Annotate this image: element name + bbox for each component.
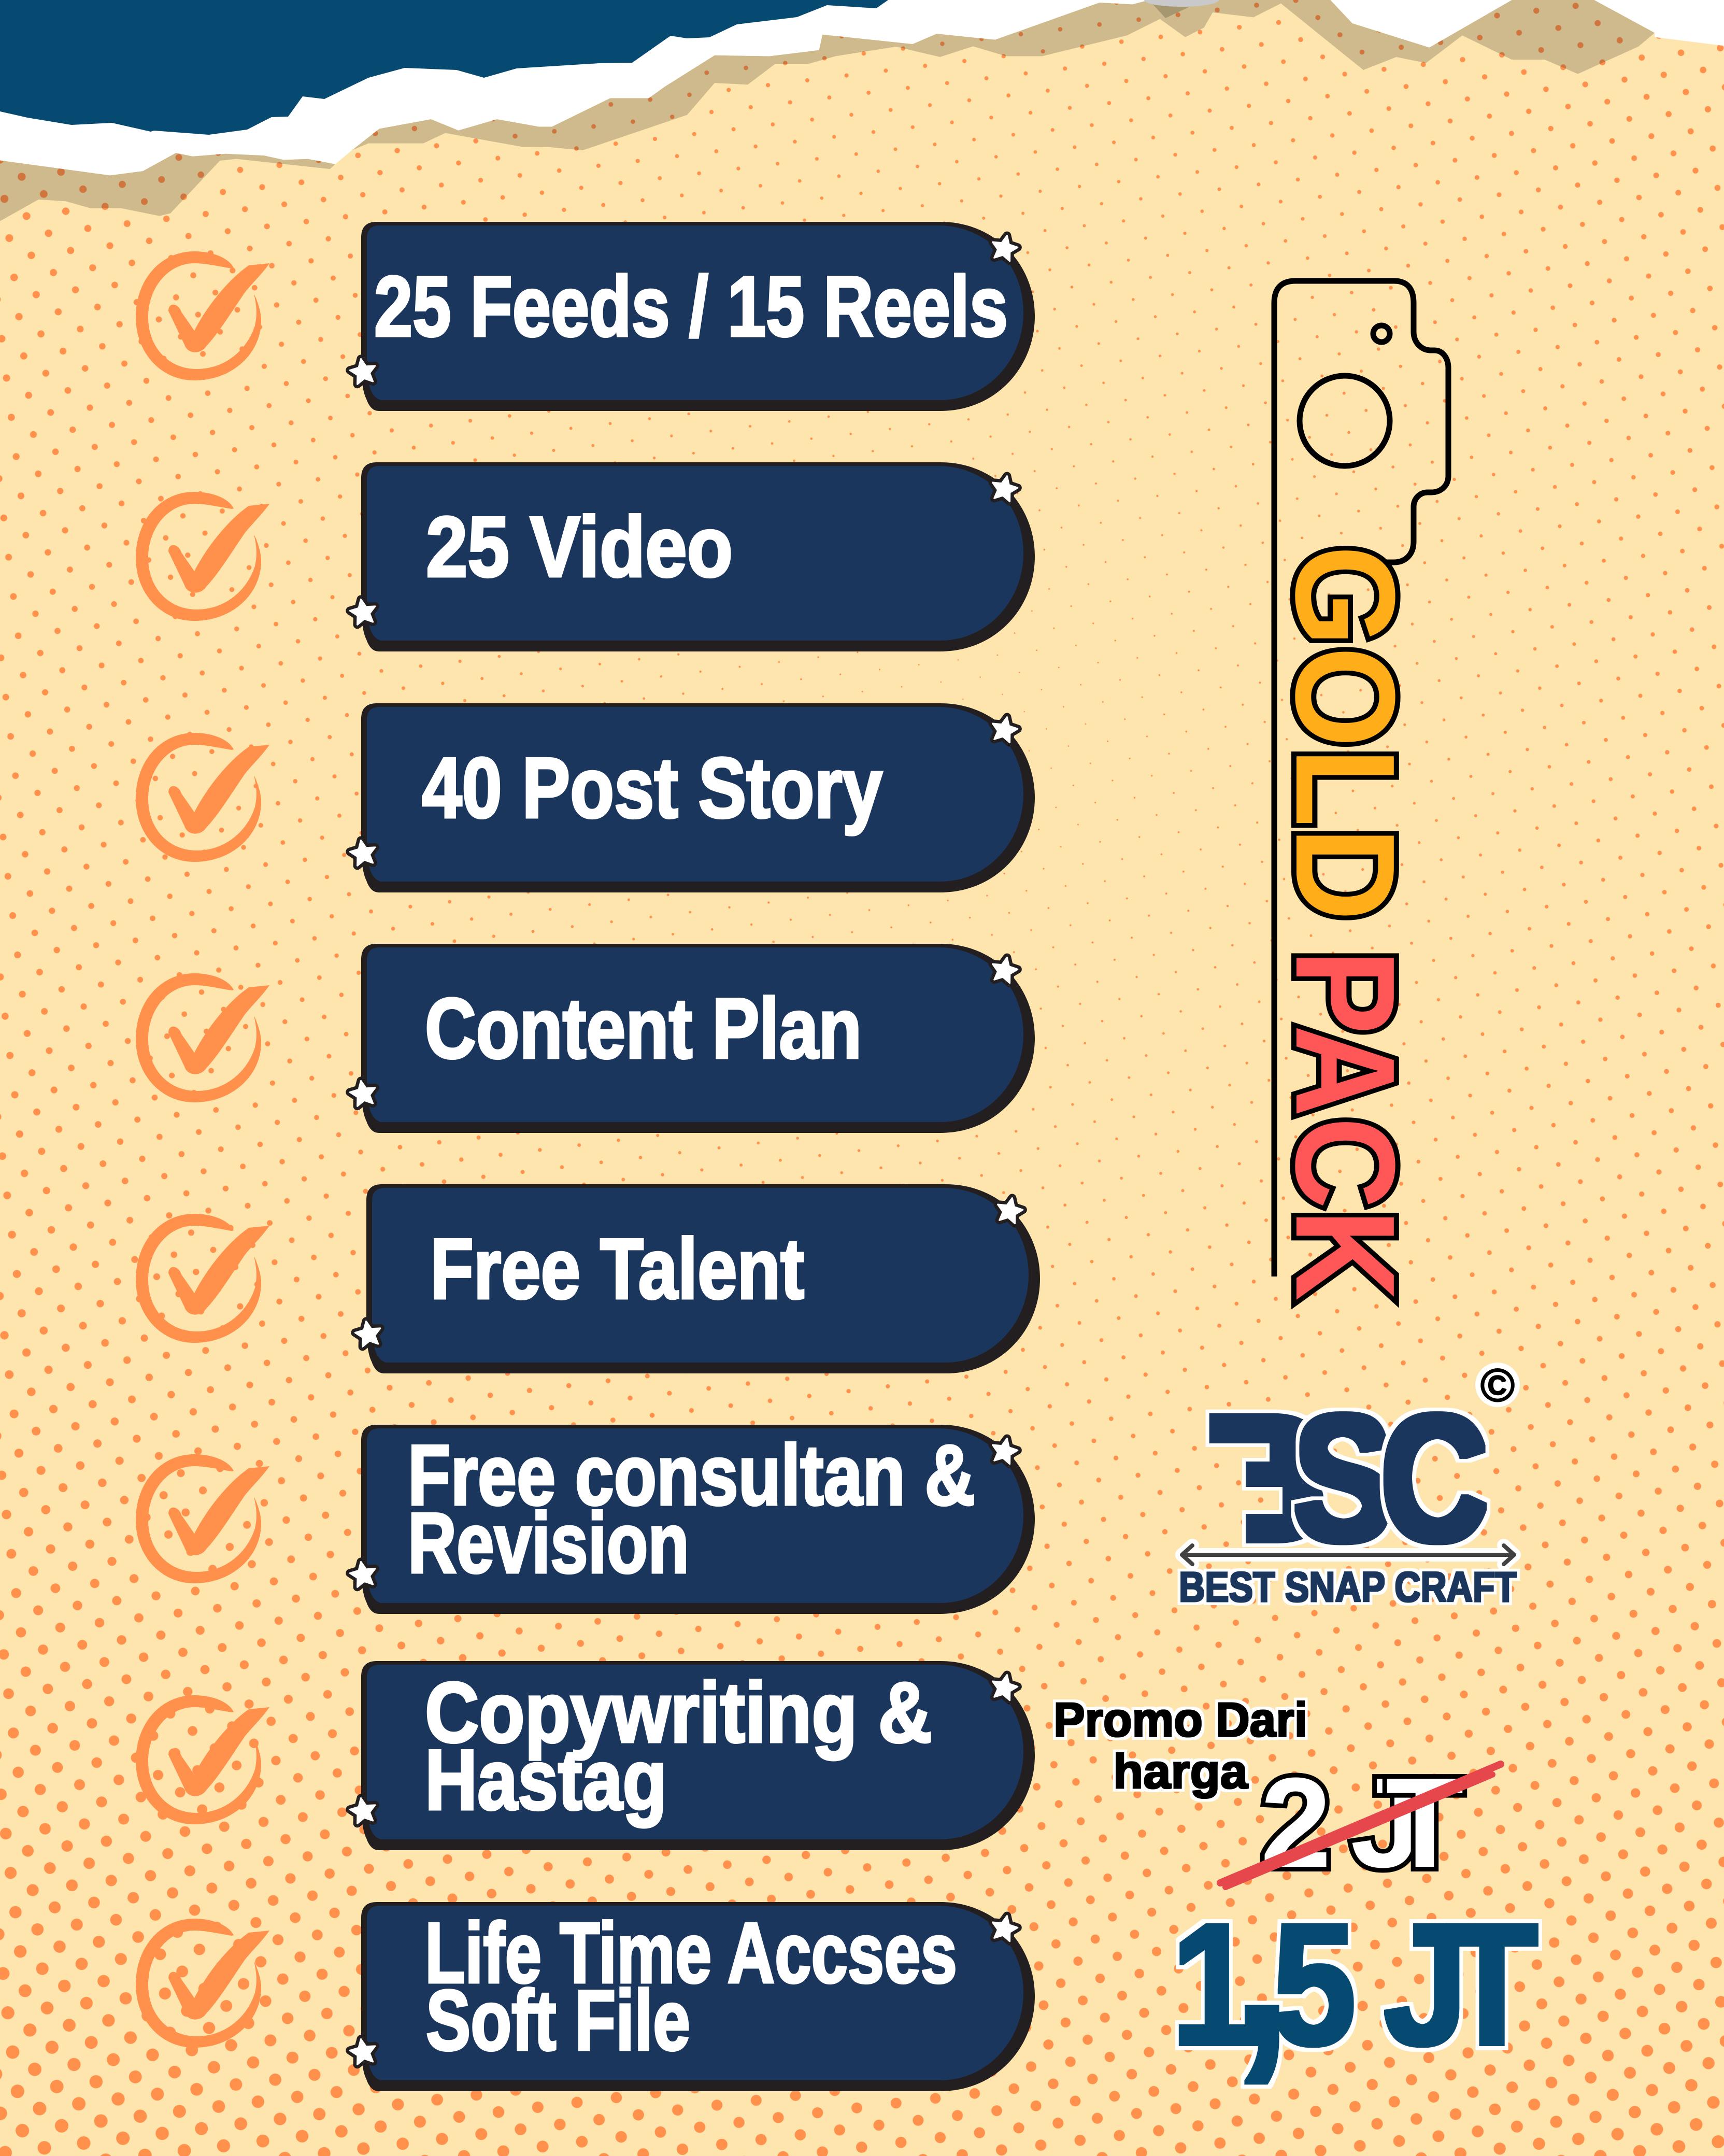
logo letters: S xyxy=(1294,1379,1392,1578)
label: Free Talent xyxy=(430,1221,804,1316)
feature row 1 xyxy=(136,222,1035,411)
new price: 5 xyxy=(1272,1889,1356,2081)
logo: BSC xyxy=(1179,1360,1520,1611)
feature row 8 xyxy=(136,1902,1035,2091)
feature row 5 xyxy=(136,1184,1040,1373)
feature row 2 xyxy=(136,462,1035,651)
label: Content Plan xyxy=(425,981,862,1076)
title: gold: GOLD xyxy=(1266,545,1424,921)
label: Soft File xyxy=(426,1973,690,2068)
promo label xyxy=(1053,1693,1307,1798)
label: 40 Post Story xyxy=(422,740,882,835)
promo label: Promo Dari xyxy=(1053,1693,1307,1747)
label xyxy=(408,1427,975,1591)
pill xyxy=(348,703,1035,892)
pill xyxy=(348,1425,1035,1614)
pill xyxy=(348,944,1035,1133)
torn paper header xyxy=(0,0,1724,221)
icon: check mark xyxy=(136,492,269,621)
label: Life Time Accses xyxy=(425,1905,957,2001)
feature row 4 xyxy=(136,944,1035,1133)
logo wordmark: BEST SNAP CRAFT xyxy=(1179,1564,1517,1611)
label: Copywriting & xyxy=(425,1665,932,1760)
old price value: J xyxy=(1350,1751,1421,1894)
label: 25 Video xyxy=(426,499,733,594)
camera flash xyxy=(1373,325,1390,342)
dark blue corner xyxy=(0,0,888,135)
label xyxy=(425,1905,957,2068)
label: Free consultan & xyxy=(408,1427,975,1523)
grey paper scrap xyxy=(1144,0,1219,7)
old price value: 2 xyxy=(1260,1751,1331,1894)
new price: J xyxy=(1384,1889,1468,2081)
label: Revision xyxy=(408,1495,689,1591)
label xyxy=(425,1665,932,1827)
feature row 7 xyxy=(136,1661,1035,1850)
label: Hastag xyxy=(425,1732,667,1827)
title: pack: PACK xyxy=(1266,949,1424,1301)
icon: check mark xyxy=(136,733,269,862)
logo arrow xyxy=(1182,1545,1514,1564)
icon: check mark xyxy=(136,973,269,1102)
logo letters: B xyxy=(1201,1379,1328,1578)
label: 25 Feeds / 15 Reels xyxy=(374,259,1008,354)
white torn paper xyxy=(0,0,1724,175)
promo label: harga xyxy=(1113,1744,1248,1798)
logo letters: C xyxy=(1381,1379,1487,1578)
pill xyxy=(348,462,1035,651)
icon: check mark xyxy=(136,1454,269,1583)
pill xyxy=(348,1902,1035,2091)
old price xyxy=(1220,1751,1501,1894)
pill xyxy=(348,1661,1035,1850)
torn paper shadow xyxy=(0,0,1655,221)
pill xyxy=(353,1184,1040,1373)
camera outline xyxy=(1274,281,1448,1276)
icon: check mark xyxy=(136,1214,269,1343)
icon: check mark xyxy=(136,1695,269,1824)
icon: check mark xyxy=(136,1919,269,2048)
new price: 1 xyxy=(1171,1889,1256,2081)
strike line xyxy=(1220,1764,1501,1887)
feature row 3 xyxy=(136,703,1035,892)
icon: check mark xyxy=(136,251,269,380)
vertical title xyxy=(1266,545,1424,1301)
pill xyxy=(348,222,1035,411)
copyright mark: © xyxy=(1480,1360,1515,1412)
feature row 6 xyxy=(136,1425,1035,1614)
logo letters xyxy=(1205,1408,1490,1548)
new price: T xyxy=(1446,1889,1538,2081)
new price: , xyxy=(1231,1819,1292,2097)
old price value: T xyxy=(1386,1751,1464,1894)
camera lens xyxy=(1300,376,1390,466)
